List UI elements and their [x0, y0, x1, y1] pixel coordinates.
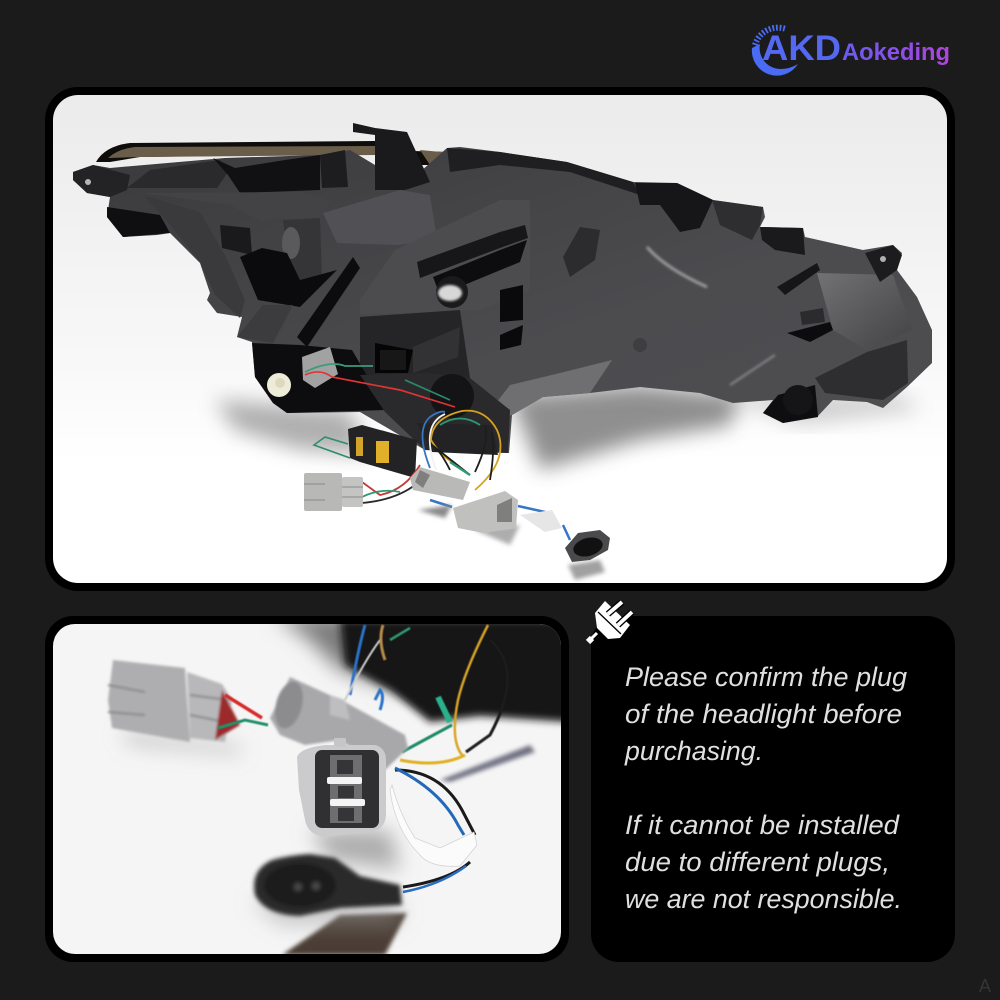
logo wordmark AKD: AKD — [762, 29, 841, 68]
gold contact module — [314, 425, 417, 478]
panel: purchase notice — [591, 616, 955, 962]
wire loom — [362, 411, 570, 540]
cooling fins — [417, 225, 528, 287]
notice text: paragraph two — [625, 810, 902, 914]
panel frame — [45, 616, 569, 962]
logo: AKD Aokeding — [752, 28, 950, 76]
lower mechanism — [252, 343, 387, 413]
right housing facets — [483, 227, 912, 420]
panel: main headlight photo — [45, 87, 955, 591]
back wires — [345, 625, 508, 763]
connector shadows — [418, 505, 605, 580]
brown shadow bottom — [282, 913, 407, 955]
left grey connector — [108, 660, 240, 742]
logo ring icon — [752, 28, 798, 76]
black plug — [254, 854, 402, 916]
lamp socket — [430, 374, 474, 418]
notice text: paragraph one: purchasing. — [624, 736, 763, 766]
notice text: paragraph one — [624, 662, 907, 766]
bracket tab — [353, 123, 430, 190]
grey socket — [302, 347, 338, 388]
grey connector left — [304, 473, 363, 511]
lens strip along top — [96, 141, 452, 165]
panel frame — [45, 87, 955, 591]
black plug — [565, 530, 610, 562]
notice text: paragraph two: If it cannot be installed — [625, 810, 900, 840]
cream cap — [267, 373, 291, 397]
notice text: paragraph one: Please confirm the plug — [625, 662, 907, 692]
notice text: paragraph one: of the headlight before — [625, 699, 902, 729]
grey connector right — [453, 491, 518, 533]
icon: electric plug — [588, 601, 632, 642]
white wire label — [520, 510, 562, 532]
ground shadows — [215, 385, 920, 470]
logo wordmark Aokeding: Aokeding — [842, 39, 950, 66]
front wires — [395, 768, 475, 892]
photo: headlight rear view — [53, 95, 947, 583]
top dark parts — [73, 148, 805, 255]
lens ball — [436, 276, 468, 308]
photo: wiring plugs close-up — [53, 615, 570, 955]
watermark fragment: A — [979, 976, 991, 996]
mid housing facets — [198, 190, 514, 378]
soft shadows — [120, 730, 400, 925]
notice background — [591, 616, 955, 962]
upper wires — [305, 364, 455, 407]
panel: connector close-up photo — [45, 615, 570, 962]
grey connector middle — [410, 467, 470, 500]
dark blurred housing background — [275, 615, 570, 690]
notice text: paragraph two: we are not responsible. — [625, 884, 902, 914]
black rod — [297, 257, 360, 347]
housing silhouette — [73, 147, 932, 453]
foot under housing right — [763, 385, 818, 423]
front grey connector — [297, 738, 386, 837]
middle grey connector — [270, 677, 408, 770]
notice text: paragraph two: due to different plugs, — [625, 847, 890, 877]
white wire label — [390, 785, 477, 866]
left connector wires — [218, 695, 268, 728]
